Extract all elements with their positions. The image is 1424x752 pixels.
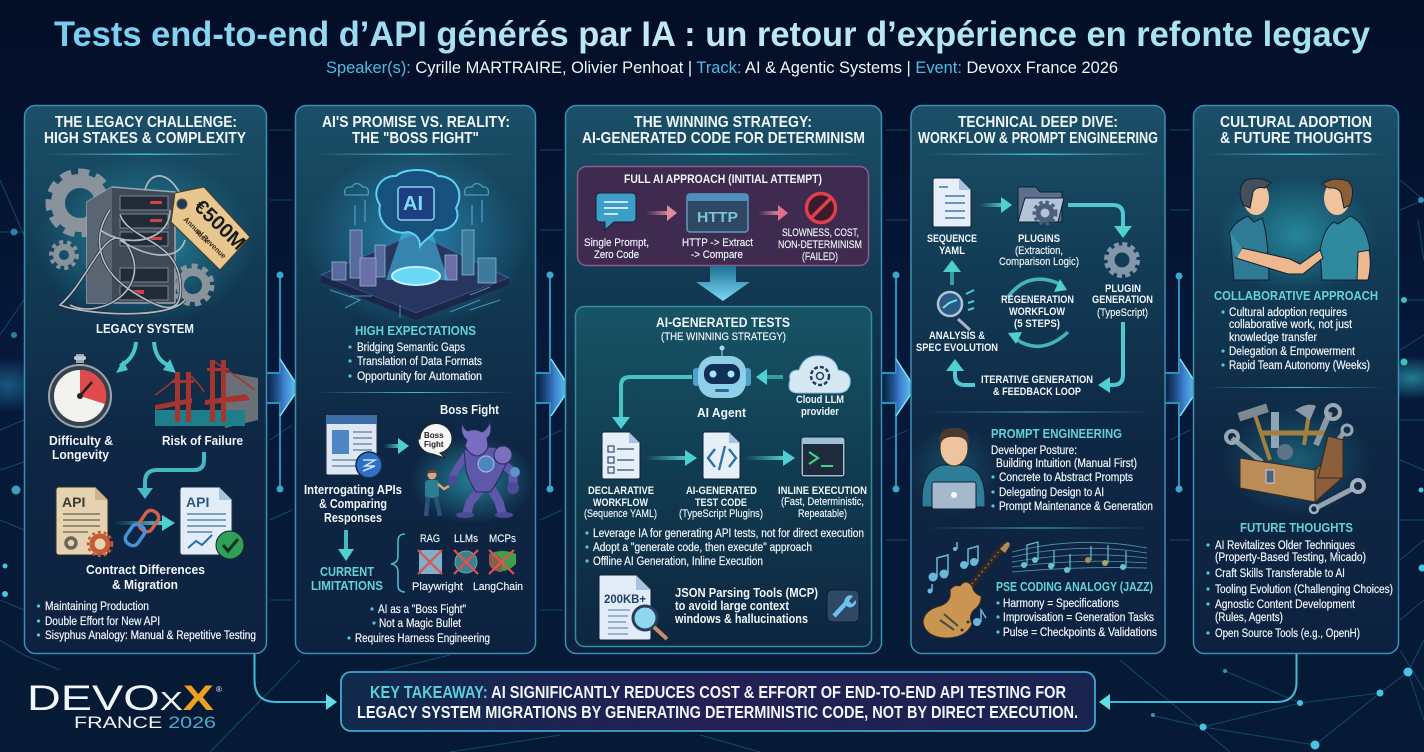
subtitle: speakers, track, event: Speaker(s): Cyrille MARTRAIRE, Olivier Penhoat | Track: AI & Agentic Systems | Event: Devoxx France 2026	[326, 59, 1118, 77]
arrow: risk to migration	[137, 452, 204, 499]
labels: full AI flow: NON-DETERMINISM	[778, 239, 862, 251]
heading: legacy challenge: HIGH STAKES & COMPLEXITY	[44, 130, 247, 147]
list: limitations: Not a Magic Bullet	[379, 618, 462, 630]
list: prompt engineering: Building Intuition (Manual First)	[996, 458, 1137, 470]
heading: promise vs reality: AI'S PROMISE VS. REALITY:	[322, 114, 510, 131]
labels: generation pipeline: Repeatable)	[798, 508, 847, 520]
arrow: panel 4 to panel 5	[1165, 359, 1199, 416]
heading: winning strategy	[582, 114, 865, 147]
icon: cloud LLM provider	[789, 356, 850, 393]
list: expectations	[348, 342, 482, 383]
text: JSON parsing tools	[674, 586, 818, 626]
heading: promise vs reality: THE "BOSS FIGHT"	[352, 130, 479, 147]
list: limitations: AI as a "Boss Fight"	[378, 604, 466, 616]
label: cloud LLM provider: provider	[801, 406, 840, 418]
icon: large JSON document with magnifier: 200KB+	[604, 594, 646, 606]
subheading: current limitations: CURRENT	[320, 564, 374, 579]
label: contract differences and migration: Contract Differences	[86, 563, 205, 577]
icon: large JSON document with magnifier	[599, 575, 667, 640]
panel: the legacy challenge	[24, 106, 266, 654]
labels: generation pipeline: WORKFLOW	[593, 497, 649, 509]
list: expectations: Translation of Data Formats	[357, 356, 482, 368]
arrow: prompt to HTTP	[646, 205, 677, 221]
label: cloud LLM provider: Cloud LLM	[796, 394, 844, 406]
arrow: down to limitations	[338, 530, 354, 561]
icon: AI brain over smart city: AI	[403, 193, 423, 215]
labels: full AI flow: Single Prompt,	[584, 237, 649, 249]
icon: legacy server with tangled wires and price tag: €500M	[190, 196, 249, 255]
icon: toolbox	[1222, 404, 1372, 515]
list: future thoughts: Tooling Evolution (Challenging Choices)	[1215, 584, 1393, 596]
text: JSON parsing tools: JSON Parsing Tools (MCP)	[675, 586, 818, 600]
heading: cultural adoption: & FUTURE THOUGHTS	[1220, 130, 1372, 147]
crossed out tools: LLMs	[454, 533, 478, 545]
icon: sequence YAML document	[933, 178, 971, 227]
list: strategy points: Offline AI Generation, Inline Execution	[593, 556, 763, 568]
label: contract differences and migration: & Migration	[112, 578, 178, 592]
labels: full AI flow: (FAILED)	[802, 251, 838, 263]
arrow: panel 1 to panel 2	[266, 359, 299, 416]
labels: full AI flow	[584, 227, 862, 263]
label: iterative generation and feedback loop: & FEEDBACK LOOP	[993, 386, 1081, 398]
crossed out tools: RAG	[420, 533, 440, 545]
logo: Devoxx France 2026: DEVO XX	[27, 679, 215, 718]
label: regeneration workflow: REGENERATION	[1001, 294, 1074, 306]
callout: key takeaway	[341, 672, 1095, 731]
brace	[391, 534, 405, 592]
label: cloud LLM provider	[796, 394, 844, 418]
heading: technical deep dive	[918, 114, 1158, 147]
labels: full AI flow: -> Compare	[691, 249, 743, 261]
label: difficulty and longevity	[49, 434, 113, 462]
icon: boss monster and developer: Boss	[424, 431, 444, 440]
icon: developer with laptop	[908, 424, 998, 516]
labels: sequence, plugins: Comparison Logic)	[999, 256, 1079, 268]
subheading: collaborative approach: COLLABORATIVE APPROACH	[1214, 288, 1378, 303]
arrows: legacy system to risks	[116, 342, 176, 373]
label: contract differences and migration	[86, 563, 205, 592]
labels: sequence, plugins: SEQUENCE	[927, 233, 977, 245]
label: interrogating APIs: Responses	[324, 511, 382, 525]
crossed out tools: MCPs	[489, 533, 516, 545]
label: plugin generation	[1092, 283, 1153, 319]
connector brackets between panels	[266, 272, 1182, 492]
labels: generation pipeline: (Fast, Deterministic,	[781, 496, 864, 508]
arrow: HTTP to failed	[758, 205, 788, 221]
logo: Devoxx France 2026: FRANCE 2026	[74, 713, 216, 732]
panel: technical deep dive	[908, 106, 1165, 654]
heading: technical deep dive: TECHNICAL DEEP DIVE:	[958, 114, 1118, 131]
label: analysis and spec evolution: ANALYSIS &	[929, 330, 985, 342]
labels: generation pipeline: (TypeScript Plugins)	[679, 508, 763, 520]
label: interrogating APIs: & Comparing	[319, 497, 387, 511]
arrow: cultural panel to key takeaway	[1099, 654, 1296, 710]
label: analysis and spec evolution: SPEC EVOLUTION	[916, 342, 998, 354]
list: jazz analogy: Improvisation = Generation Tasks	[1003, 612, 1154, 624]
icon: wrench	[827, 590, 859, 622]
text: JSON parsing tools: to avoid large context	[675, 599, 790, 613]
labels: generation pipeline: TEST CODE	[695, 497, 747, 509]
label: analysis and spec evolution	[916, 330, 998, 354]
list: future thoughts	[1206, 540, 1393, 640]
list: prompt engineering: Delegating Design to AI	[999, 487, 1104, 499]
list: collaboration: Rapid Team Autonomy (Weeks)	[1229, 360, 1370, 372]
label: plugin generation: PLUGIN	[1105, 283, 1141, 295]
subheading: future thoughts: FUTURE THOUGHTS	[1240, 520, 1353, 535]
list: future thoughts: Open Source Tools (e.g., OpenH)	[1215, 628, 1360, 640]
crossed out tools: Playwright	[412, 581, 463, 593]
label: legacy system: LEGACY SYSTEM	[96, 322, 194, 336]
label: boss fight: Boss Fight	[440, 403, 500, 417]
list: strategy points: Adopt a "generate code, then execute" approach	[593, 542, 812, 554]
heading: legacy challenge	[44, 114, 247, 147]
labels: sequence, plugins: (Extraction,	[1015, 245, 1063, 257]
subheading: current limitations	[311, 564, 383, 593]
label: regeneration workflow: WORKFLOW	[1009, 306, 1066, 318]
list: prompt engineering: Developer Posture:	[991, 445, 1077, 457]
icon: plugin generation gear	[1106, 244, 1138, 276]
labels: generation pipeline: INLINE EXECUTION	[778, 485, 867, 497]
list: prompt engineering: Prompt Maintenance & Generation	[999, 501, 1153, 513]
list: future thoughts: AI Revitalizes Older Techniques	[1215, 540, 1355, 552]
labels: full AI flow: Zero Code	[594, 249, 639, 261]
heading: winning strategy: AI-GENERATED CODE FOR DETERMINISM	[582, 130, 865, 147]
panel: the winning strategy	[566, 106, 882, 654]
arrow: agent to declarative workflow	[612, 377, 692, 429]
arrow: generation to feedback loop	[1098, 322, 1123, 393]
label: iterative generation and feedback loop	[981, 374, 1093, 398]
label: interrogating APIs: Interrogating APIs	[304, 483, 402, 497]
crossed out tools	[412, 533, 523, 593]
arrow: panel 2 to panel 3	[536, 359, 570, 416]
icon: legacy server with tangled wires and price tag: Risk	[194, 229, 209, 245]
icon: boss monster and developer: Fight	[424, 440, 444, 449]
arrow: analysis to YAML	[943, 260, 961, 285]
logo: Devoxx France 2026: ®	[216, 685, 222, 694]
labels: generation pipeline: (Sequence YAML)	[584, 508, 657, 520]
list: jazz analogy	[996, 598, 1157, 639]
list: legacy challenge points	[37, 601, 256, 642]
label: difficulty and longevity: Difficulty &	[49, 434, 113, 448]
labels: sequence, plugins: YAML	[939, 245, 965, 257]
arrow: workflow to code	[646, 450, 697, 466]
heading: cultural adoption	[1220, 114, 1372, 147]
icon: chat prompt	[596, 193, 636, 230]
label: AI agent: AI Agent	[697, 406, 747, 420]
label: plugin generation: GENERATION	[1092, 294, 1153, 306]
heading: technical deep dive: WORKFLOW & PROMPT ENGINEERING	[918, 130, 1158, 147]
list: prompt engineering: Concrete to Abstract Prompts	[999, 472, 1133, 484]
icon: analysis magnifier	[938, 290, 974, 330]
icon: HTTP window	[687, 194, 748, 232]
labels: generation pipeline: AI-GENERATED	[686, 485, 757, 497]
labels: full AI flow: HTTP -> Extract	[682, 237, 753, 249]
arrow: plugins to generation	[1068, 205, 1132, 238]
icon: API browser window	[326, 415, 382, 478]
list: limitations	[347, 604, 490, 645]
panel: cultural adoption	[1194, 106, 1398, 654]
icon: old API contract	[56, 487, 112, 556]
label: iterative generation and feedback loop: ITERATIVE GENERATION	[981, 374, 1093, 386]
arrow: panel 3 to panel 4	[882, 359, 915, 416]
heading: full AI approach: FULL AI APPROACH (INITIAL ATTEMPT)	[624, 172, 822, 186]
panel: AI's promise vs reality	[296, 106, 536, 654]
list: strategy points: Leverage IA for generating API tests, not for direct execution	[593, 528, 864, 540]
icon: prohibition sign	[806, 194, 836, 222]
icon: declarative workflow document	[602, 432, 640, 479]
list: collaboration: collaborative work, not just	[1229, 319, 1353, 331]
icon: guitar and music notes	[923, 542, 1147, 638]
list: limitations: Requires Harness Engineering	[355, 633, 490, 645]
list: legacy challenge points: Maintaining Production	[45, 601, 149, 613]
callout: key takeaway: LEGACY SYSTEM MIGRATIONS BY GENERATING DETERMINISTIC CODE, NOT BY DIRECT EXECUTION.	[357, 702, 1078, 722]
list: strategy points	[585, 528, 864, 568]
list: legacy challenge points: Sisyphus Analogy: Manual & Repetitive Testing	[45, 630, 256, 642]
list: jazz analogy: Pulse = Checkpoints & Validations	[1003, 627, 1157, 639]
sub-panel: full AI approach	[578, 166, 868, 266]
arrow: legacy panel to key takeaway	[254, 654, 337, 710]
list: legacy challenge points: Double Effort for New API	[45, 616, 160, 628]
list: jazz analogy: Harmony = Specifications	[1003, 598, 1119, 610]
icon: plugins folder with gear	[1018, 187, 1064, 224]
sub-panel: AI-generated tests	[576, 306, 872, 646]
subheading: PSE coding analogy: PSE CODING ANALOGY (JAZZ)	[996, 579, 1153, 594]
list: collaboration: Cultural adoption requires	[1229, 307, 1347, 319]
label: risk of failure: Risk of Failure	[162, 434, 243, 448]
icon: handshake	[1217, 175, 1377, 295]
heading: AI-generated tests: AI-GENERATED TESTS	[656, 315, 790, 330]
list: collaboration	[1221, 307, 1370, 372]
title: Tests end-to-end d’API générés par IA : un retour d’expérience en refonte legacy	[54, 15, 1371, 54]
heading: winning strategy: THE WINNING STRATEGY:	[634, 114, 812, 131]
list: expectations: Bridging Semantic Gaps	[357, 342, 465, 354]
icon: new API contract with check	[180, 487, 244, 559]
list: collaboration: Delegation & Empowerment	[1229, 346, 1356, 358]
subheading: high expectations: HIGH EXPECTATIONS	[355, 323, 476, 338]
subheading: current limitations: LIMITATIONS	[311, 578, 383, 593]
arrow: YAML to plugins	[980, 197, 1012, 213]
icon: old API contract: API	[62, 494, 85, 510]
callout: key takeaway: KEY TAKEAWAY: AI SIGNIFICANTLY REDUCES COST & EFFORT OF END-TO-END API TESTING FOR	[370, 682, 1066, 702]
heading: promise vs reality	[322, 114, 510, 147]
label: difficulty and longevity: Longevity	[52, 448, 109, 462]
icon: HTTP window: HTTP	[697, 209, 738, 226]
list: future thoughts: (Rules, Agents)	[1215, 612, 1283, 624]
labels: full AI flow: SLOWNESS, COST,	[782, 227, 859, 239]
label: regeneration workflow	[1001, 294, 1074, 330]
icon: AI brain over smart city	[304, 150, 528, 330]
icon: terminal	[801, 437, 845, 477]
list: collaboration: knowledge transfer	[1229, 332, 1317, 344]
icon: broken bridge	[155, 360, 258, 428]
labels: generation pipeline: DECLARATIVE	[588, 485, 654, 497]
list: prompt engineering	[991, 445, 1153, 513]
arrow: APIs to boss fight	[384, 438, 409, 454]
heading: AI-generated tests: (THE WINNING STRATEGY)	[661, 331, 786, 343]
crossed out tools: LangChain	[473, 581, 523, 593]
label: plugin generation: (TypeScript)	[1097, 307, 1148, 319]
list: expectations: Opportunity for Automation	[357, 371, 482, 383]
labels: generation pipeline	[584, 485, 867, 520]
icon: boss monster and developer	[410, 422, 534, 524]
label: interrogating APIs	[304, 483, 402, 525]
list: future thoughts: (Property-Based Testing, Micado)	[1215, 552, 1366, 564]
heading: legacy challenge: THE LEGACY CHALLENGE:	[55, 114, 237, 131]
text: JSON parsing tools: windows & hallucinations	[674, 612, 808, 626]
subheading: prompt engineering: PROMPT ENGINEERING	[991, 426, 1122, 441]
heading: cultural adoption: CULTURAL ADOPTION	[1220, 114, 1372, 131]
labels: sequence, plugins	[927, 233, 1079, 268]
label: regeneration workflow: (5 STEPS)	[1014, 318, 1060, 330]
icon: generated code document	[703, 432, 740, 479]
icon: stopwatch	[49, 354, 111, 427]
arrow: code to execution	[745, 450, 795, 466]
icon: legacy server with tangled wires and price tag	[35, 155, 255, 325]
arrow: cloud to agent	[756, 369, 783, 385]
logo: Devoxx France 2026	[27, 679, 222, 732]
arrow: feedback to analysis	[946, 359, 975, 385]
icon: regeneration cycle arrows	[1008, 279, 1068, 346]
icon: new API contract with check: API	[186, 494, 209, 510]
icon: broken chain and arrow	[114, 508, 175, 548]
labels: sequence, plugins: PLUGINS	[1018, 233, 1060, 245]
icon: legacy server with tangled wires and price tag: Annual Revenue	[182, 215, 228, 260]
list: future thoughts: Craft Skills Transferable to AI	[1215, 568, 1345, 580]
arrow: full AI to AI-generated tests	[696, 266, 750, 301]
icon: AI agent robot	[693, 346, 751, 398]
heading: AI-generated tests	[656, 315, 790, 343]
list: future thoughts: Agnostic Content Development	[1215, 599, 1356, 611]
